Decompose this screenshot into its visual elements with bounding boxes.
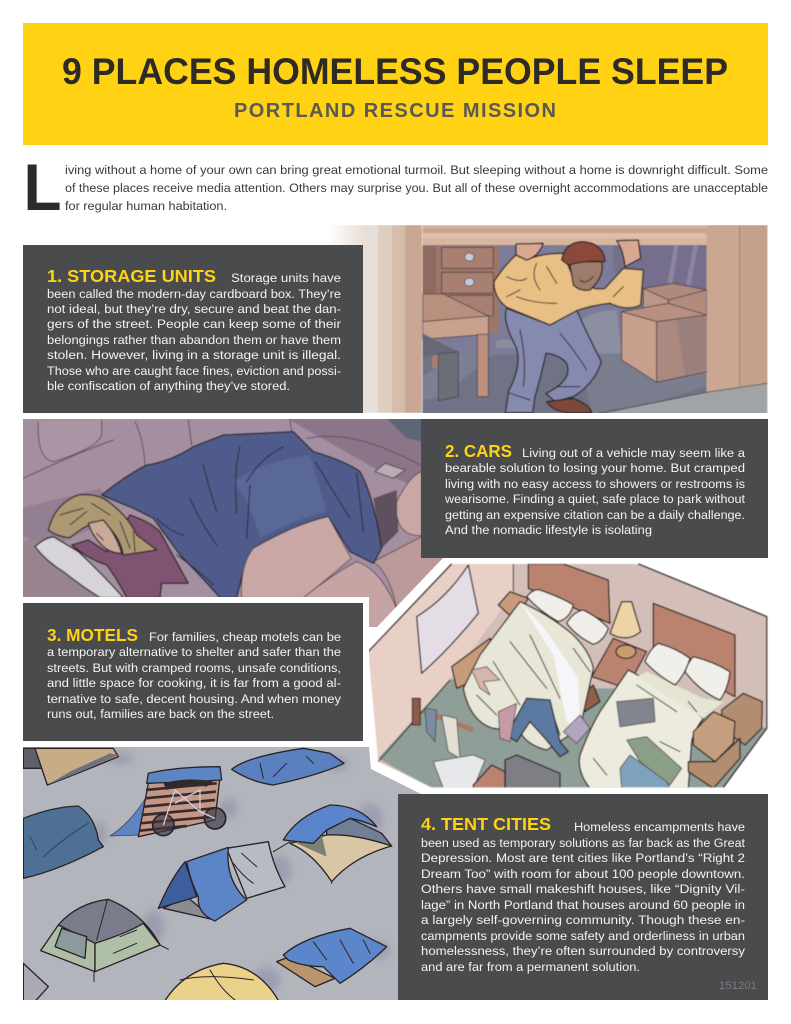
intro paragraph with drop cap: of these places receive media attention. Others may surprise you. But all of these overnight accommodations are unacceptable [65,181,768,195]
body text: motels: ternative to safe, decent housing. And when money [47,692,342,706]
header banner [23,23,768,145]
tent: green dome [41,899,168,982]
tarp on pallet [277,928,387,987]
body text: tent cities: lage” in North Portland that houses around 60 people in [421,898,745,912]
heading: motels: 3. MOTELS [47,625,138,645]
blue bag [495,340,515,348]
tarp: blue left [23,806,103,878]
body text: storage units: stolen. However, living in a storage unit is illegal. [47,348,341,362]
heading: tent cities: 4. TENT CITIES [421,814,551,834]
shoe [547,398,592,413]
face [88,520,122,553]
tarp: blue top [232,748,344,785]
dresser [423,246,499,333]
body text: tent cities: Depression. Most are tent cities like Portland’s “Right 2 [421,851,745,865]
tent: blue tarp and tan tent [273,805,392,883]
illustration: motel room [360,555,773,795]
intro paragraph with drop cap: for regular human habitation. [65,199,227,213]
bed one [463,590,608,750]
seat cushions [305,462,443,627]
panel: cars [421,419,768,558]
body text: motels: streets. But with cramped rooms, unsafe conditions, [47,661,341,675]
door frame [423,225,767,415]
body text: motels: a temporary alternative to shelter and safer than the [47,645,341,659]
title: 9 PLACES HOMELESS PEOPLE SLEEP [62,50,728,92]
illustration: man in storage unit [328,225,767,415]
body text: cars [444,446,746,537]
body text: storage units: gers of the street. People can keep some of their [47,317,341,331]
tent: tan top left [23,748,118,785]
body text: storage units: ble confiscation of anything they’ve stored. [47,379,290,393]
body text: cars: wearisome. Finding a quiet, safe place to park without [444,492,746,506]
heading: storage units: 1. STORAGE UNITS [47,266,216,286]
cardboard boxes [688,693,762,788]
panel: tent cities [398,794,768,1000]
body text: tent cities: Dream Too” with room for about 100 people downtown. [421,867,745,881]
panel: storage units [23,245,363,413]
cushion over blanket [241,517,351,598]
desk [423,294,488,397]
body text: tent cities: campments provide some safety and orderliness in urban [421,929,745,943]
body text: cars: getting an expensive citation can be a daily challenge. [445,508,745,522]
heading: cars: 2. CARS [445,441,512,461]
maroon sweater [72,515,188,598]
body text: storage units [47,271,341,393]
body text: tent cities: homelessness, they’re often surrounded by controversy [421,944,746,958]
body text: motels: runs out, families are back on the street. [47,707,274,721]
body text: storage units: Those who are caught face fines, eviction and possi- [47,364,341,378]
nightstands [452,592,647,712]
tent: yellow dome [163,963,280,1003]
body text: storage units: been called the modern-day cardboard box. They’re [47,287,341,301]
intro paragraph with drop cap [24,150,768,224]
panel: motels [23,597,369,747]
headboards [528,564,610,623]
clothes rack [412,698,485,788]
body text: cars: And the nomadic lifestyle is isolating [445,523,652,537]
stool [423,333,458,401]
jacket [494,253,643,325]
body text: motels [47,630,342,721]
body text: cars: Living out of a vehicle may seem like a [522,446,745,460]
subtitle: PORTLAND RESCUE MISSION [234,100,556,122]
curtain [417,565,478,673]
body text: tent cities: and are far from a permanent solution. [421,960,640,974]
body text: motels: and little space for cooking, it is far from a good al- [47,676,341,690]
jeans [505,308,601,413]
face [569,262,602,290]
lamp [610,602,641,658]
storage boxes [622,283,707,382]
pallet with bicycle [110,767,226,837]
pillow [35,537,123,598]
blanket [102,432,382,598]
tent: gray bottom left [23,963,48,1003]
body text: cars: living with no easy access to showers or restrooms is [445,477,745,491]
bed two [579,643,730,788]
body text: tent cities: Others have small makeshift houses, like “Dignity Vil- [421,882,745,896]
shadows [93,752,390,993]
television [505,755,560,788]
intro paragraph with drop cap: iving without a home of your own can bring great emotional turmoil. But sleeping without a home is downright difficult. Some [65,163,768,177]
illustration: tent city [23,747,423,1003]
body text: cars: bearable solution to losing your home. But cramped [445,461,745,475]
body text: storage units: Storage units have [231,271,341,285]
jeans on bed [507,698,568,757]
body text: motels: For families, cheap motels can be [149,630,341,644]
body text: storage units: not ideal, but they’re dry, secure and beat the dan- [47,302,341,316]
body text: storage units: belongings rather than abandon them or have them [47,333,341,347]
body text: tent cities: a largely self-governing community. Though these en- [421,913,745,927]
knit hat [562,242,605,265]
document code: 151201 [719,980,757,992]
body text: tent cities: Homeless encampments have [574,820,745,834]
body text: tent cities [421,820,746,974]
hair [48,495,157,555]
tent: tarp and gray sheet [158,842,285,921]
low table [473,765,505,788]
body text: tent cities: been used as temporary solutions as far back as the Great [421,836,746,850]
man crouching [494,240,643,413]
drop cap L: L [24,150,62,224]
hands [516,243,543,260]
illustration: woman sleeping in car [23,419,443,627]
